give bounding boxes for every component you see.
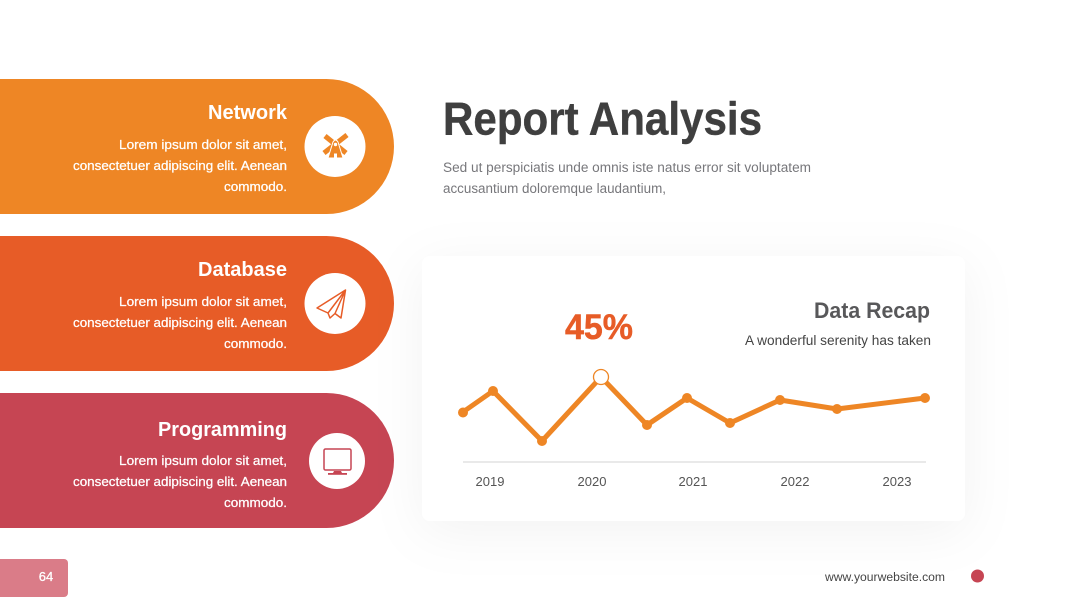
icon: paper plane bbox=[304, 273, 366, 334]
text block: programming: commodo. bbox=[224, 495, 287, 510]
text block: database: commodo. bbox=[224, 336, 287, 351]
line chart: 2021 bbox=[679, 474, 707, 489]
title: Report Analysis bbox=[443, 92, 762, 144]
heading: data recap: Data Recap bbox=[814, 298, 930, 323]
panel: network bbox=[0, 79, 394, 214]
line chart: 2022 bbox=[781, 474, 809, 489]
heading: database: Database bbox=[198, 258, 287, 281]
page number tab bbox=[0, 559, 68, 597]
text block: database bbox=[73, 294, 287, 351]
footer website: www.yourwebsite.com bbox=[824, 572, 945, 584]
subtitle: accusantium doloremque laudantium, bbox=[443, 181, 666, 196]
line chart: 2020 bbox=[578, 474, 606, 489]
panel: programming bbox=[0, 393, 394, 528]
text block: network bbox=[73, 137, 287, 194]
subtitle: Sed ut perspiciatis unde omnis iste natus error sit voluptatem bbox=[443, 160, 811, 175]
icon: monitor bbox=[309, 433, 365, 489]
line chart: 2023 bbox=[883, 474, 911, 489]
text block: programming bbox=[73, 453, 287, 510]
panel: database bbox=[0, 236, 394, 371]
stat: 45%: 45% bbox=[565, 308, 633, 347]
text block: network: commodo. bbox=[224, 179, 287, 194]
subtitle bbox=[443, 160, 811, 196]
page number tab: 64 bbox=[39, 569, 53, 584]
line chart: 2019 bbox=[476, 474, 504, 489]
caption: A wonderful serenity has taken bbox=[745, 333, 931, 348]
icon: windmill bbox=[304, 116, 366, 177]
panel: data recap chart card bbox=[422, 256, 965, 521]
text block: database: consectetuer adipiscing elit. Aenean bbox=[73, 315, 287, 330]
line chart bbox=[458, 370, 930, 489]
heading: network: Network bbox=[208, 101, 288, 124]
text block: programming: consectetuer adipiscing elit. Aenean bbox=[73, 474, 287, 489]
footer dot bbox=[971, 570, 984, 582]
text block: network: Lorem ipsum dolor sit amet, bbox=[119, 137, 287, 152]
heading: programming: Programming bbox=[158, 418, 287, 441]
text block: programming: Lorem ipsum dolor sit amet, bbox=[119, 453, 287, 468]
text block: database: Lorem ipsum dolor sit amet, bbox=[119, 294, 287, 309]
text block: network: consectetuer adipiscing elit. Aenean bbox=[73, 158, 287, 173]
